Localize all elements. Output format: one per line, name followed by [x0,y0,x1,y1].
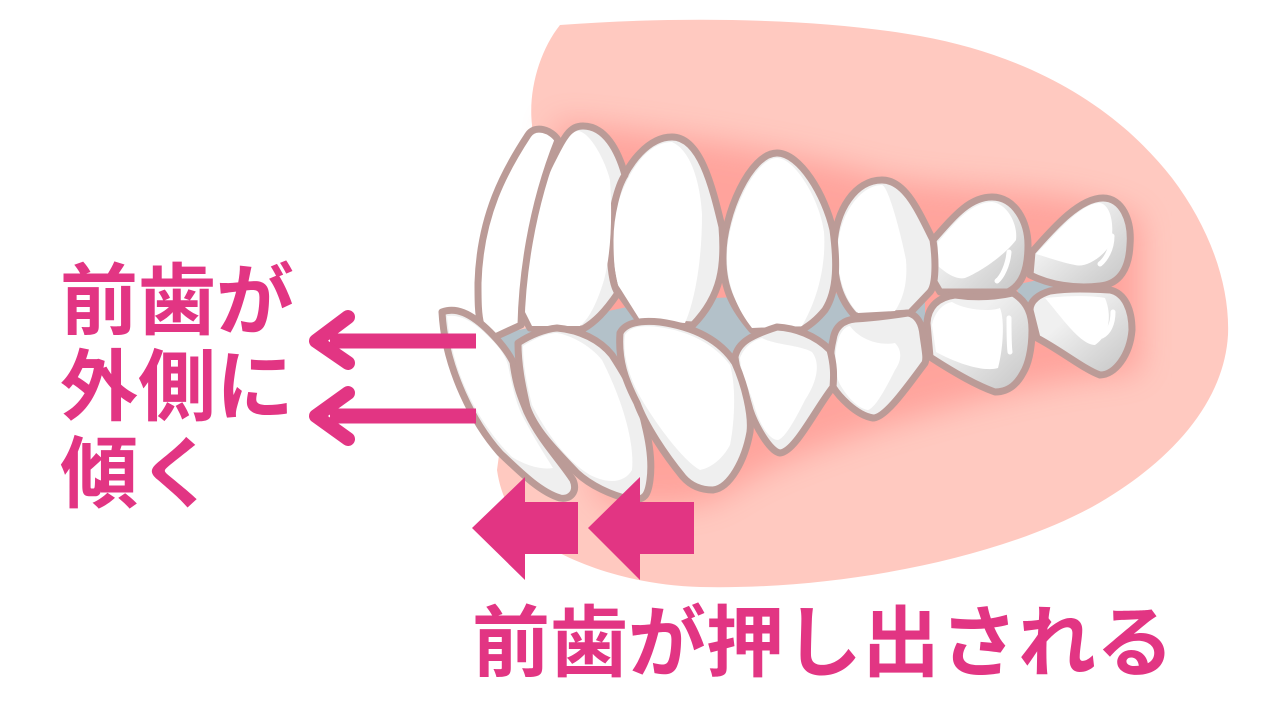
lower tooth 4 [735,327,834,453]
arrow: upper thin left arrow [316,317,476,363]
lower tooth 3 [620,321,750,490]
lower teeth [442,289,1132,500]
upper tooth 1 [478,129,558,337]
upper tooth 5 [834,180,935,316]
lower tooth 7 [1030,289,1132,375]
arrow: first block arrow [472,477,578,580]
arrow: second block arrow [588,477,694,580]
label: front teeth tilt outward: 前歯が [60,257,294,345]
upper tooth 6 [933,197,1028,292]
upper tooth 7 [1030,198,1130,287]
upper tooth 3 [609,137,723,325]
upper tooth 4 [723,153,836,330]
label: front teeth tilt outward: 外側に [60,343,294,431]
label: front teeth tilt outward [60,257,294,518]
arrow: lower thin left arrow [316,393,476,439]
upper teeth [478,126,1130,337]
gaps between teeth [495,275,1060,370]
label: front teeth tilt outward: 傾く [60,430,216,518]
lower tooth 6 [927,293,1032,392]
gum [497,20,1228,587]
lower tooth 1 [442,310,575,498]
label: front teeth pushed out: 前歯が押し出される [472,599,1174,687]
lower tooth 5 [830,313,926,418]
gum shadow [555,122,1140,507]
lower tooth 2 [518,328,651,500]
upper tooth 2 [520,126,625,329]
